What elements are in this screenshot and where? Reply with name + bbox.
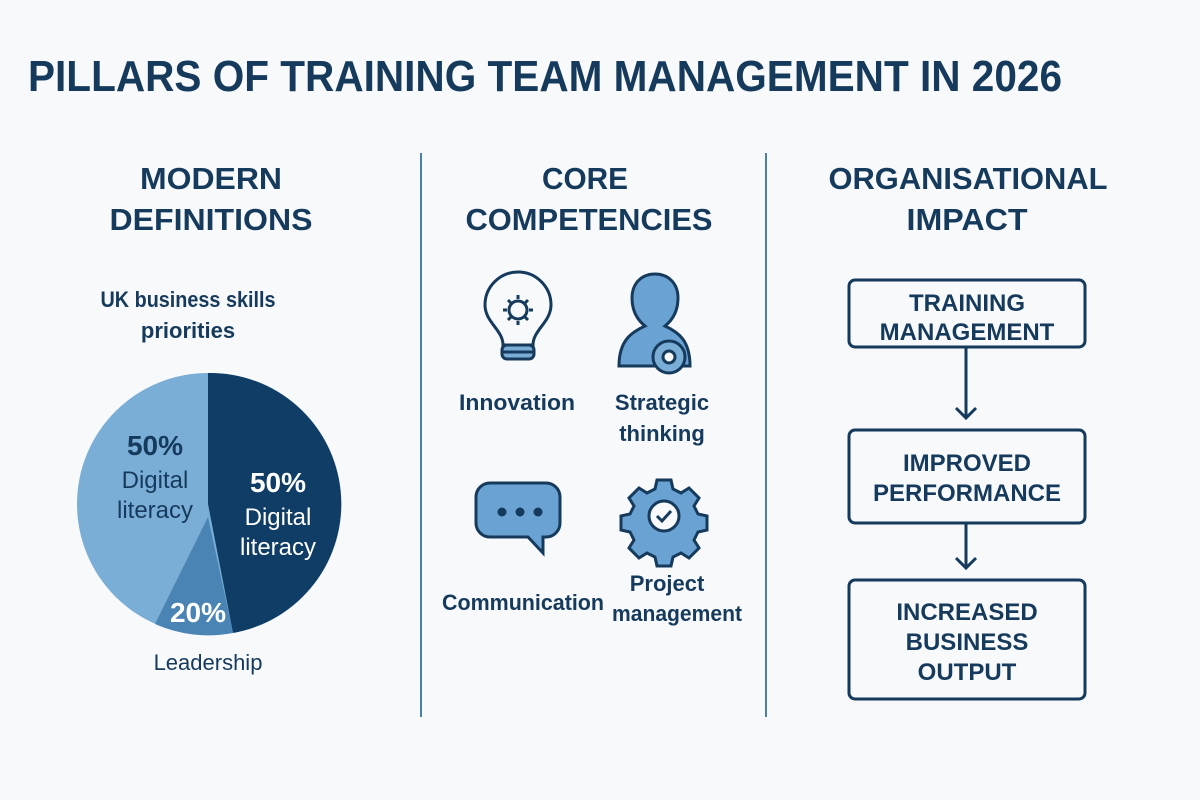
pie chart: 50% <box>250 467 306 498</box>
box: increased business output: BUSINESS <box>906 629 1028 656</box>
heading: core competencies: CORE <box>542 161 628 196</box>
pie chart: Leadership <box>154 650 262 675</box>
pie chart: literacy <box>117 497 193 524</box>
heading: core competencies <box>466 161 712 237</box>
heading: organisational impact: IMPACT <box>906 202 1028 237</box>
subtitle: UK business skills <box>100 287 276 312</box>
box: improved performance: IMPROVED <box>903 450 1031 477</box>
heading: modern definitions: MODERN <box>140 161 282 196</box>
pie chart <box>77 373 341 675</box>
labels: Project <box>630 571 705 596</box>
heading: modern definitions: DEFINITIONS <box>110 202 312 237</box>
labels: Strategic <box>615 390 709 415</box>
box: improved performance: PERFORMANCE <box>873 480 1061 507</box>
heading: modern definitions <box>110 161 312 237</box>
labels: thinking <box>619 421 705 446</box>
icon: lightbulb <box>485 272 551 359</box>
box: training management <box>849 280 1085 347</box>
pie chart: Digital <box>245 504 311 531</box>
box: increased business output <box>849 580 1085 699</box>
subtitle <box>100 287 276 343</box>
panel: modern definitions <box>77 161 341 675</box>
pie chart: 50% <box>127 430 183 461</box>
box: increased business output: OUTPUT <box>918 659 1017 686</box>
labels: management <box>612 601 743 626</box>
arrow <box>956 347 976 418</box>
labels <box>442 390 743 626</box>
box: training management: TRAINING <box>909 290 1025 317</box>
pie chart: literacy <box>240 534 316 561</box>
icon: gear with check <box>621 480 707 566</box>
subtitle: priorities <box>141 318 235 343</box>
icon: speech bubble <box>476 483 560 553</box>
box: training management: MANAGEMENT <box>880 319 1055 346</box>
icon: person <box>619 274 690 373</box>
heading: core competencies: COMPETENCIES <box>466 202 712 237</box>
heading: organisational impact <box>828 161 1108 237</box>
pie chart: 20% <box>170 597 226 628</box>
pie chart: Digital <box>122 467 188 494</box>
panel: organisational impact <box>828 161 1108 699</box>
heading: organisational impact: ORGANISATIONAL <box>828 161 1108 196</box>
box: increased business output: INCREASED <box>896 599 1038 626</box>
panel: core competencies <box>442 161 743 626</box>
box: improved performance <box>849 430 1085 523</box>
labels: Innovation <box>459 390 575 415</box>
title: PILLARS OF TRAINING TEAM MANAGEMENT IN 2026 <box>28 52 1062 101</box>
arrow <box>956 523 976 568</box>
labels: Communication <box>442 590 604 615</box>
